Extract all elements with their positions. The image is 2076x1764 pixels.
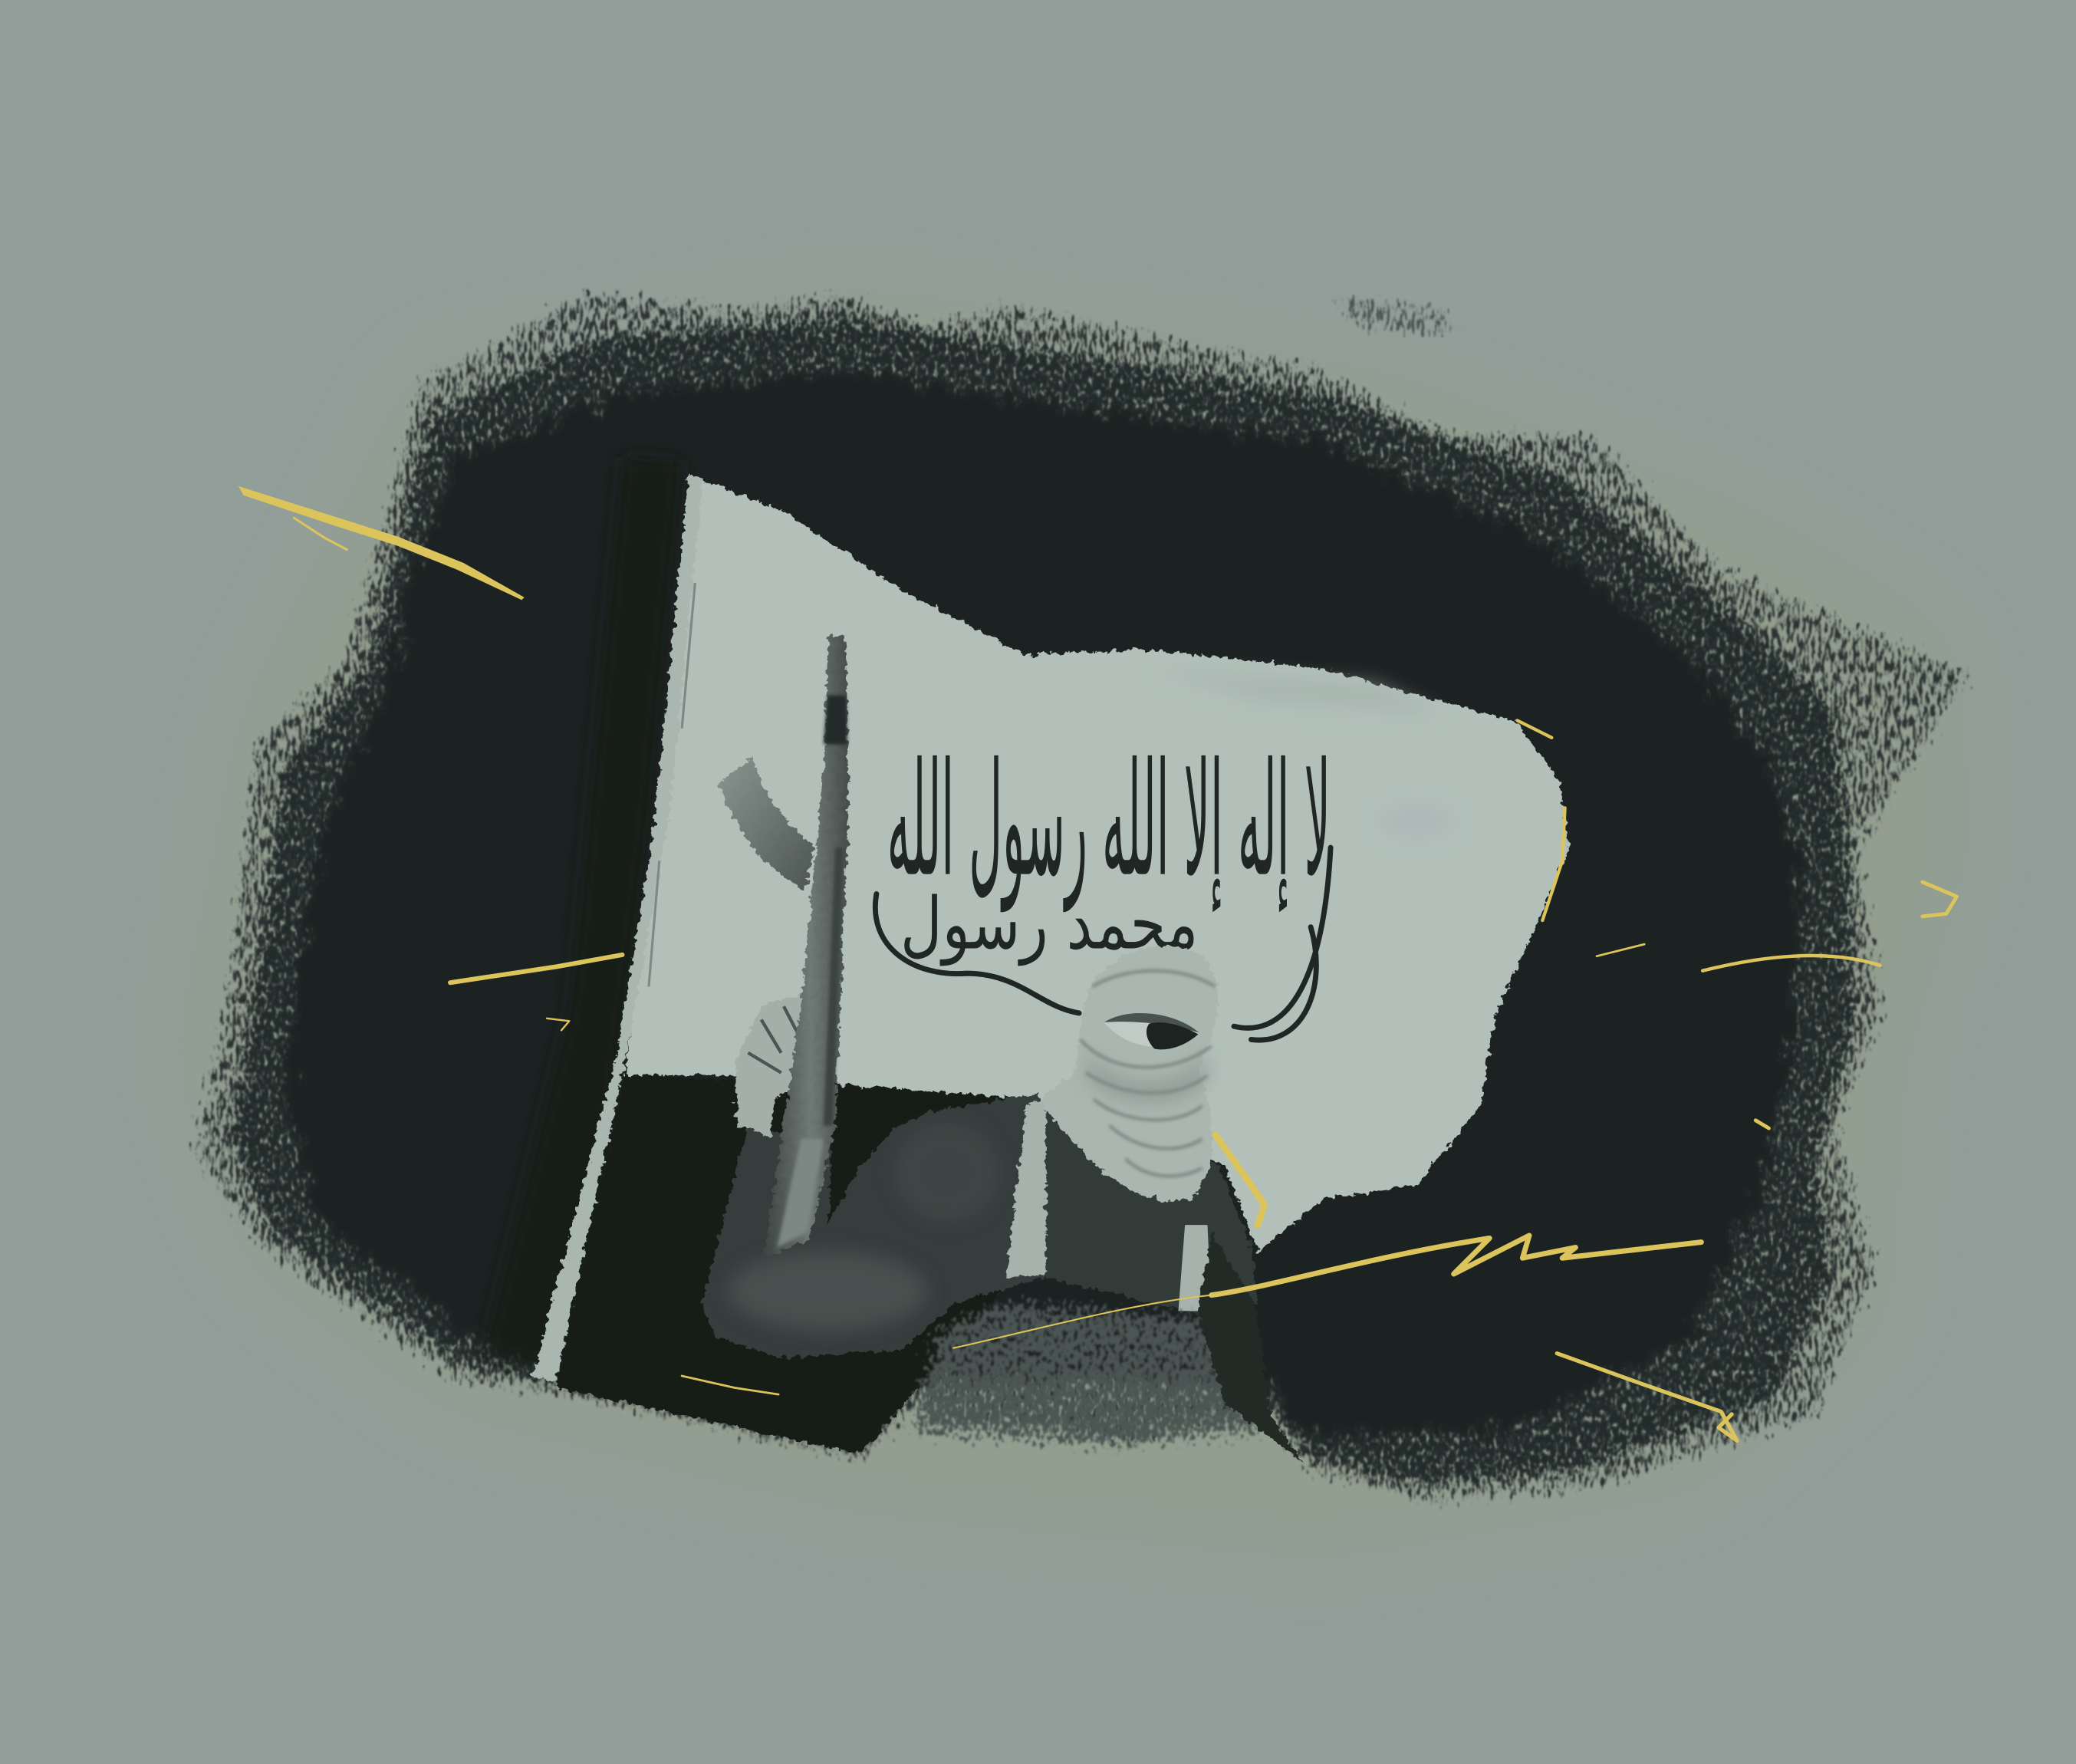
charcoal mass: dense core xyxy=(285,371,1801,1446)
calligraphy on the flag xyxy=(887,730,1331,966)
long stroke right xyxy=(1703,956,1880,971)
rifle stock highlight xyxy=(777,1139,824,1247)
flag xyxy=(532,474,1569,1380)
hand gripping rifle xyxy=(736,991,827,1136)
stroke mid left xyxy=(450,955,622,982)
dark shadow between arm and rifle xyxy=(827,1092,926,1225)
scarf strip right xyxy=(1178,1225,1212,1311)
scarf folds xyxy=(1081,971,1216,1177)
calligraphy sweeping baseline strokes xyxy=(875,847,1331,1040)
flag pole xyxy=(532,474,703,1380)
yellow strokes xyxy=(239,486,1957,1441)
shadow under eye xyxy=(1086,1053,1210,1101)
scarf strip left xyxy=(1006,1099,1046,1278)
charcoal mass: outer hatched edge xyxy=(199,294,1966,1499)
stroke on flag top right xyxy=(1517,720,1551,738)
chevron far right xyxy=(1923,882,1957,917)
eye socket xyxy=(1104,1015,1199,1047)
stroke upper left xyxy=(239,486,525,600)
flag cloth xyxy=(625,477,1569,1252)
raised arm and shoulder robe xyxy=(702,1092,1059,1358)
eyelid shadow xyxy=(1104,1013,1199,1033)
long lightning stroke thin part xyxy=(953,1295,1212,1348)
black lower-left field under the flag xyxy=(556,1075,1033,1454)
flag highlight fold xyxy=(1374,800,1459,842)
stroke bottom right xyxy=(1557,1354,1737,1441)
small hook mid left xyxy=(547,1019,569,1030)
right robe edge xyxy=(1198,1232,1304,1463)
charcoal mass: intermediate dense layer xyxy=(232,318,1854,1483)
torso xyxy=(1039,1106,1258,1314)
lower charcoal mound xyxy=(913,1305,1258,1443)
calligraphy lower line: محمد رسول xyxy=(900,881,1198,966)
rifle muzzle dark band xyxy=(824,696,847,744)
short stroke right xyxy=(1597,944,1644,956)
stroke bottom left xyxy=(682,1376,778,1394)
long lightning stroke thick part xyxy=(1212,1236,1701,1295)
small stroke upper left xyxy=(294,518,347,550)
pole scratch marks xyxy=(649,583,695,986)
stroke at collar xyxy=(1216,1135,1265,1225)
rifle barrel and body xyxy=(764,636,849,1258)
stroke flag right edge xyxy=(1542,808,1565,920)
finger lines xyxy=(748,1006,801,1073)
darkest band beside the flagpole xyxy=(483,457,682,1371)
smudge above the mass xyxy=(1337,298,1449,334)
rifle body dark stripe xyxy=(824,847,844,1126)
figure xyxy=(702,636,1304,1463)
flag shading xyxy=(1152,669,1443,715)
eye xyxy=(1104,1013,1199,1049)
shoulder highlight xyxy=(893,1121,999,1223)
iris xyxy=(1147,1022,1198,1049)
head wrap xyxy=(1039,946,1218,1201)
tick right xyxy=(1755,1121,1768,1128)
olive halo around the charcoal mass xyxy=(186,298,1959,1549)
elbow sleeve highlight xyxy=(729,1252,926,1331)
rifle magazine xyxy=(719,758,814,890)
